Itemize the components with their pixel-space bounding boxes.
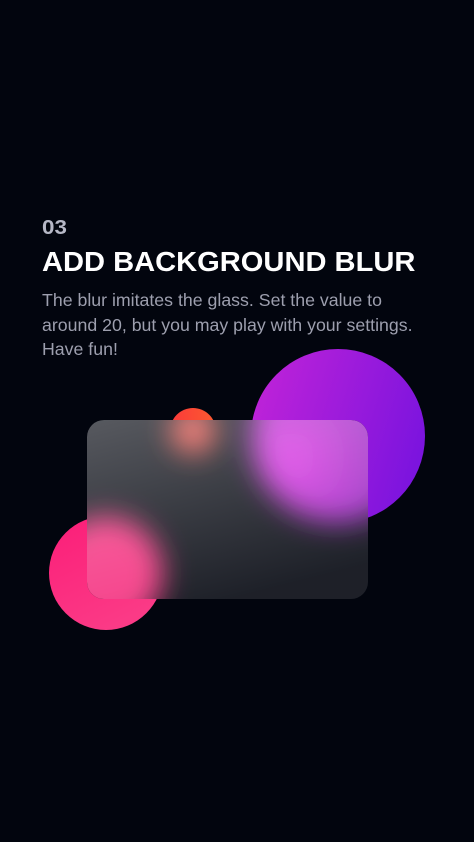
pink circle bbox=[49, 516, 163, 630]
step number: 03 bbox=[42, 217, 67, 239]
red circle bbox=[170, 408, 216, 454]
body text: around 20, but you may play with your settings. bbox=[42, 314, 413, 334]
glass card bbox=[87, 420, 368, 599]
body text: The blur imitates the glass. Set the value to bbox=[42, 290, 382, 310]
body text bbox=[42, 290, 413, 359]
purple circle bbox=[251, 349, 425, 523]
glass illustration bbox=[49, 349, 425, 630]
body text: Have fun! bbox=[42, 339, 118, 359]
title: ADD BACKGROUND BLUR bbox=[42, 246, 415, 277]
